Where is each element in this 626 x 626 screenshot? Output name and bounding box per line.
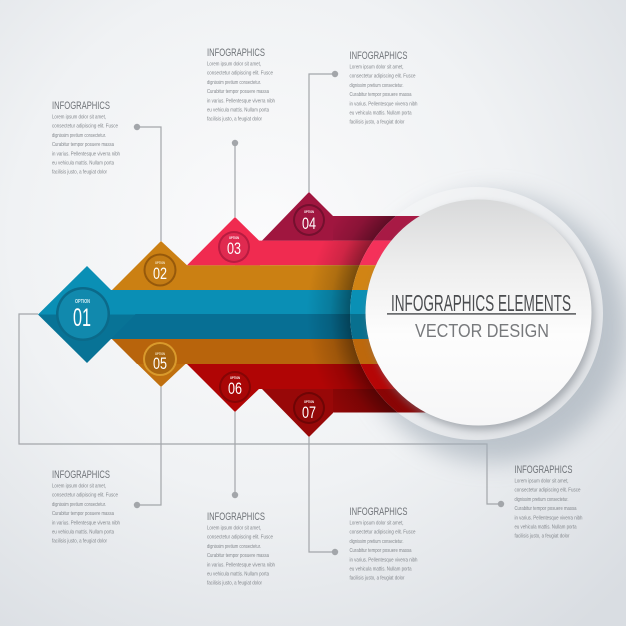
text block: top left: consectetur adipiscing elit. Fusce (52, 124, 118, 130)
text block: bottom left: facilisis justo, a feugiat dolor (52, 539, 107, 545)
text block: bottom left: in varius. Pellentesque viverra nibh (52, 520, 120, 526)
stripe 04 (309, 216, 420, 241)
text block: bottom centre right: Lorem ipsum dolor sit amet, (350, 520, 404, 526)
stripe 03 (235, 241, 397, 265)
badge 01: 01 (73, 304, 91, 332)
inner circle shadow (368, 204, 594, 430)
stripe 02 (161, 265, 383, 290)
text block: top middle: Lorem ipsum dolor sit amet, (207, 62, 261, 68)
text block: bottom left: eu vehicula mattis. Nullam porta (52, 530, 114, 536)
text block: bottom middle: facilisis justo, a feugiat dolor (207, 581, 262, 587)
text block: far right: eu vehicula mattis. Nullam porta (514, 524, 576, 530)
text block: top middle: facilisis justo, a feugiat dolor (207, 117, 262, 123)
badge 06 (219, 371, 251, 403)
diamond 03 (187, 217, 260, 265)
text block: top middle: dignissim pretium consectetur. (207, 80, 261, 86)
badge 01: OPTION (75, 299, 90, 305)
text block: far right: Curabitur tempor posuere massa (514, 506, 576, 512)
badge 02: 02 (153, 265, 167, 283)
text block: top right (350, 50, 418, 126)
diamond 04 (262, 192, 333, 241)
text block: far right: Lorem ipsum dolor sit amet, (514, 478, 569, 484)
text block: top right: Lorem ipsum dolor sit amet, (350, 64, 404, 70)
text block: top left: INFOGRAPHICS (52, 100, 110, 112)
stripe 01 (87, 290, 377, 314)
text block: far right: dignissim pretium consectetur. (514, 497, 568, 503)
text block: bottom centre right: INFOGRAPHICS (350, 506, 408, 518)
text block: top middle: eu vehicula mattis. Nullam porta (207, 108, 269, 114)
diamond 02 (112, 241, 187, 290)
text block: bottom centre right: dignissim pretium consectetur. (350, 539, 404, 545)
text block: bottom centre right: eu vehicula mattis. Nullam porta (350, 566, 412, 572)
badge 03: 03 (227, 240, 241, 258)
outer circle (350, 187, 603, 440)
badge 07 (293, 392, 325, 424)
diamond 06 (187, 364, 260, 412)
badge 07: OPTION (304, 400, 314, 404)
text block: top middle: consectetur adipiscing elit. Fusce (207, 71, 273, 77)
text block: far right (514, 464, 582, 540)
text block: top right: INFOGRAPHICS (350, 50, 408, 62)
badge 03 (218, 231, 250, 263)
badge 05: OPTION (155, 352, 165, 356)
badge 05: 05 (153, 355, 167, 373)
badge 04: 04 (302, 215, 316, 233)
badge 06: 06 (228, 380, 242, 398)
inner circle (366, 200, 592, 426)
text block: top left: facilisis justo, a feugiat dolor (52, 170, 107, 176)
text block: bottom middle: Curabitur tempor posuere massa (207, 553, 269, 559)
text block: top right: in varius. Pellentesque viverra nibh (350, 101, 418, 107)
text block: bottom centre right: Curabitur tempor posuere massa (350, 548, 412, 554)
text block: bottom left: Curabitur tempor posuere massa (52, 511, 114, 517)
stripe 06 (235, 364, 397, 389)
text block: top right: consectetur adipiscing elit. Fusce (350, 74, 416, 80)
text block: far right: in varius. Pellentesque viverra nibh (514, 515, 582, 521)
title: VECTOR DESIGN (415, 321, 549, 341)
text block: top right: Curabitur tempor posuere massa (350, 92, 412, 98)
text block: bottom left: Lorem ipsum dolor sit amet, (52, 484, 106, 490)
text block: bottom middle: INFOGRAPHICS (207, 511, 265, 523)
text block: bottom left: INFOGRAPHICS (52, 469, 110, 481)
text block: far right: facilisis justo, a feugiat dolor (514, 534, 570, 540)
text block: top left: dignissim pretium consectetur. (52, 133, 106, 139)
stripe 07 (309, 389, 420, 412)
badge 05 (143, 342, 177, 376)
text block: bottom middle: in varius. Pellentesque viverra nibh (207, 562, 275, 568)
text block: top left: Curabitur tempor posuere massa (52, 142, 114, 148)
badge 02: OPTION (155, 261, 165, 265)
badge 04: OPTION (304, 210, 314, 214)
text block: top right: eu vehicula mattis. Nullam porta (350, 110, 412, 116)
badge 07: 07 (302, 404, 316, 422)
text block: bottom centre right: in varius. Pellentesque viverra nibh (350, 557, 418, 563)
diamond 01 (38, 266, 136, 314)
text block: bottom centre right (350, 506, 418, 582)
title (387, 290, 576, 341)
text block: bottom middle (207, 511, 275, 587)
circle backdrop shadow (358, 194, 626, 462)
badge 02 (144, 254, 176, 286)
text block: bottom middle: eu vehicula mattis. Nullam porta (207, 572, 269, 578)
diamond 05 (112, 339, 187, 387)
text block: top left: in varius. Pellentesque viverra nibh (52, 151, 120, 157)
stripe 05 (161, 339, 383, 364)
text block: top right: dignissim pretium consectetur. (350, 83, 404, 89)
badge 01 (56, 287, 110, 341)
text block: top middle: in varius. Pellentesque viverra nibh (207, 98, 275, 104)
stripe shadow (300, 216, 420, 412)
text block: top right: facilisis justo, a feugiat dolor (350, 120, 405, 126)
text block: far right: INFOGRAPHICS (514, 464, 572, 476)
text block: bottom middle: Lorem ipsum dolor sit amet, (207, 526, 261, 532)
text block: top left: eu vehicula mattis. Nullam porta (52, 160, 114, 166)
text block: bottom left: dignissim pretium consectetur. (52, 502, 106, 508)
text block: top middle: Curabitur tempor posuere massa (207, 89, 269, 95)
connector lines (19, 74, 501, 552)
text block: bottom left: consectetur adipiscing elit. Fusce (52, 493, 118, 499)
text block: top left: Lorem ipsum dolor sit amet, (52, 114, 106, 120)
text block: bottom left (52, 469, 120, 545)
badge 03: OPTION (229, 236, 239, 240)
text block: bottom centre right: consectetur adipiscing elit. Fusce (350, 530, 416, 536)
connector dots (134, 71, 504, 555)
arrow stripes (87, 216, 420, 412)
badge 04 (293, 204, 325, 236)
badge 06: OPTION (230, 376, 240, 380)
text block: top left (52, 100, 120, 176)
diamond 07 (262, 389, 333, 437)
text block: top middle: INFOGRAPHICS (207, 47, 265, 59)
text block: bottom middle: dignissim pretium consectetur. (207, 544, 261, 550)
text block: bottom middle: consectetur adipiscing elit. Fusce (207, 535, 273, 541)
text block: bottom centre right: facilisis justo, a feugiat dolor (350, 576, 405, 582)
text block: far right: consectetur adipiscing elit. Fusce (514, 488, 580, 494)
stripes inside translucent ring (350, 216, 426, 412)
text block: top middle (207, 47, 275, 123)
